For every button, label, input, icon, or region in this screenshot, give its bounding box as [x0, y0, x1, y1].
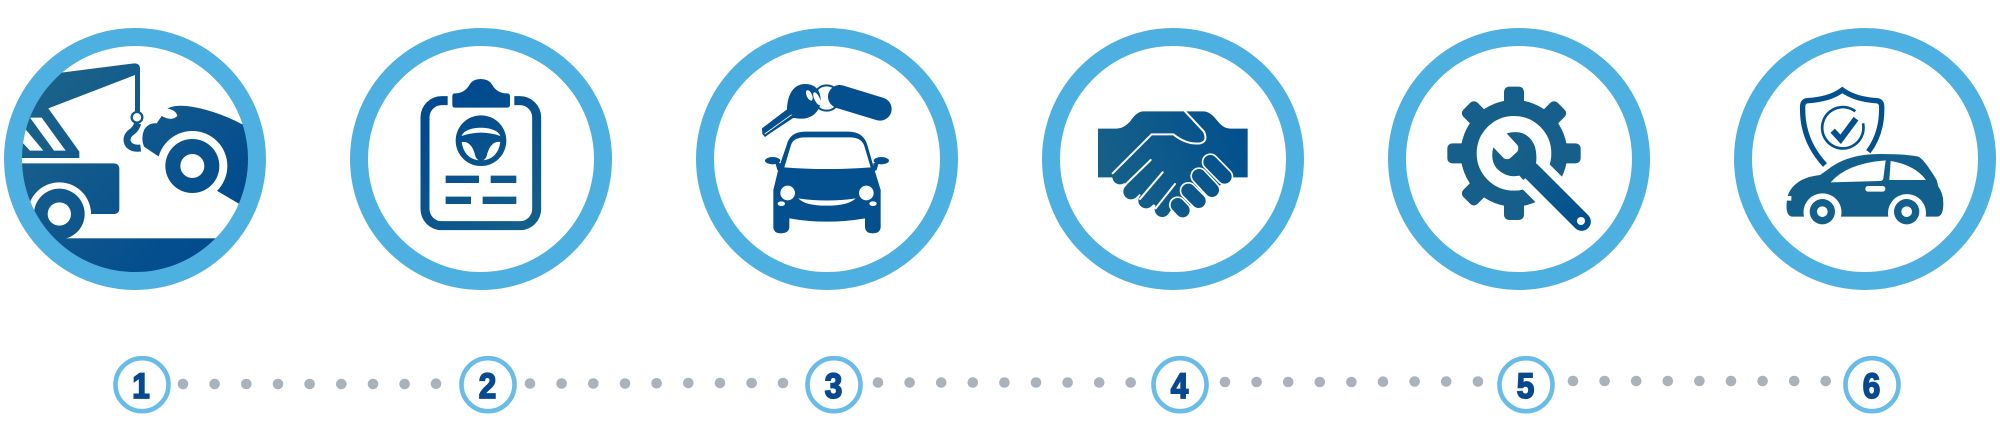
truck wheel	[30, 182, 91, 238]
text lines	[446, 176, 516, 204]
step number 6: 6	[1863, 368, 1880, 406]
car	[1786, 154, 1943, 224]
step number 6	[1846, 358, 1898, 411]
step number 3: 3	[825, 368, 842, 406]
step number 3	[808, 358, 860, 411]
crane boom	[13, 63, 140, 158]
dotted connector 4 to 5	[1220, 376, 1483, 387]
car	[765, 132, 889, 233]
step number 5	[1500, 358, 1552, 411]
step number 4	[1154, 358, 1206, 411]
towed car	[142, 106, 248, 204]
step 5: gear and wrench icon	[1447, 87, 1593, 234]
check mark in circle	[1822, 107, 1863, 148]
key fob	[840, 97, 880, 109]
shield	[1803, 90, 1882, 165]
thumb and finger separators	[1113, 111, 1205, 208]
gear	[1447, 87, 1581, 220]
dotted connector 1 to 2	[178, 378, 441, 389]
truck body	[13, 163, 119, 214]
step 1: tow truck icon	[13, 63, 257, 275]
dotted connector 5 to 6	[1568, 376, 1831, 386]
steering wheel	[456, 115, 506, 166]
clipboard outline	[425, 101, 537, 226]
crane white stripes	[20, 118, 66, 151]
step number 2	[462, 358, 514, 411]
step 6: insured car icon	[1786, 90, 1943, 224]
step number 5: 5	[1517, 368, 1534, 406]
hook	[127, 112, 142, 148]
step 4: handshake icon	[1098, 111, 1248, 210]
dotted connector 3 to 4	[873, 377, 1136, 388]
step number 1: 1	[132, 368, 150, 406]
step number 4: 4	[1171, 368, 1189, 406]
clipboard clip	[452, 79, 510, 108]
large rings around icons	[13, 37, 1987, 281]
dotted connector 2 to 3	[525, 378, 788, 389]
left hand fingers	[1120, 153, 1175, 209]
road	[55, 238, 216, 272]
right hand fingers	[1178, 162, 1225, 210]
step number 2: 2	[479, 368, 496, 406]
key	[762, 84, 822, 137]
key ring	[814, 85, 839, 111]
hands silhouette	[1098, 111, 1248, 210]
step 2: clipboard icon	[425, 79, 537, 226]
step number 1	[116, 358, 168, 411]
step 3: car and key icon	[762, 84, 889, 233]
wrench	[1492, 132, 1585, 225]
